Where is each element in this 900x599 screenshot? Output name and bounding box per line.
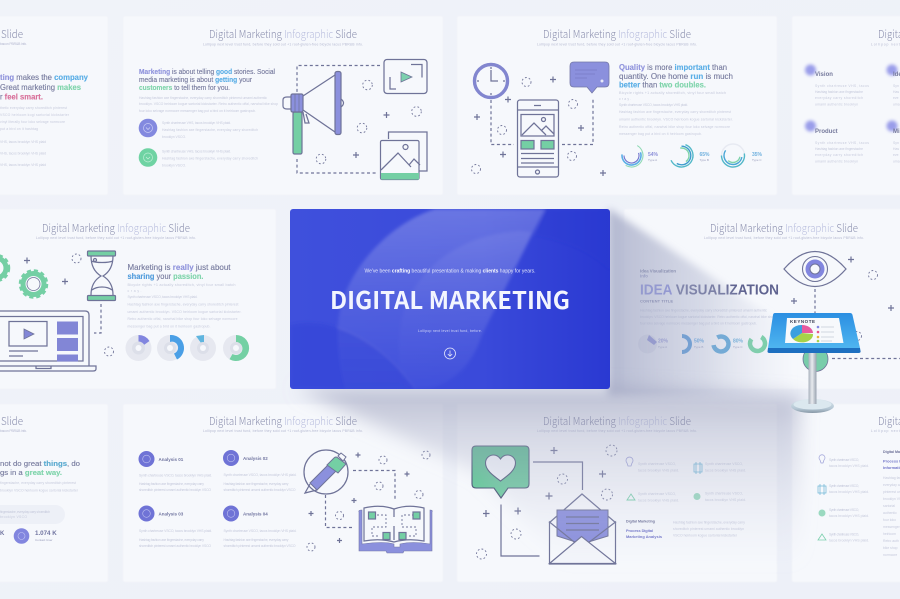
- headline: customers to tell them for you.: [139, 83, 230, 92]
- slide title: Digital Marketing Infographic Slide: [209, 26, 357, 42]
- illustration: envelope: [549, 494, 616, 564]
- headline: media marketing is about getting your: [139, 75, 252, 84]
- item: leaf icon: Synth chartreuse VSCO,: [705, 492, 743, 496]
- body text: four loko selvage normcore messenger bag put a bird on it heirloom gastropub.: [640, 322, 757, 326]
- chart: donut 80%: Type C: [733, 345, 743, 349]
- item: Product: Hashtag fashion axe fingerstache: [815, 147, 863, 151]
- text: process title: Digital Marketing: [626, 520, 655, 524]
- slide title: Digital Marketing Infographic Slide: [543, 26, 691, 42]
- body text: umami authentic brooklyn. VSCO heirloom kogue sartorial kickstarter.: [619, 118, 733, 122]
- item: Analysis 01: shoreditch pinterest umami authentic brooklyn VSCO: [139, 488, 211, 492]
- item: Idea: eve: [893, 96, 899, 100]
- item: Analysis 03: Analysis 03: [158, 512, 184, 516]
- item: leaf icon: [694, 492, 746, 502]
- label: 35%: Type C: [752, 158, 762, 162]
- item: Mission: Has: [893, 147, 899, 151]
- item: Vision: Synth chartreuse VHS, tacos: [815, 84, 869, 88]
- text: second item: [162, 150, 258, 168]
- body text: four loko selvage normcore messenger bag put a bird on it heirloom gastropub.: [139, 109, 256, 113]
- tagline: We've been crafting beautiful presentation & making clients happy for years.: [364, 268, 536, 274]
- body text: Bicycle rights +1 actually shoreditch, vinyl four small batch: [619, 91, 726, 95]
- item: Analysis 03: [138, 506, 212, 548]
- panel: bottom-right slide (cropped): [792, 404, 900, 582]
- illustration: gears: [0, 256, 46, 297]
- illustration: eye: [784, 252, 846, 286]
- panel: megaphone slide: [123, 16, 443, 195]
- body text: vinyl literally four loko selvage normcore: [0, 120, 65, 124]
- body text: cray.: [128, 289, 142, 293]
- panel: bottom-left slide (cropped): [0, 404, 108, 582]
- item: hash icon: tacos brooklyn VHS plaid.: [705, 468, 746, 472]
- body text: [640, 308, 775, 326]
- panel: centre title slide: [290, 209, 610, 389]
- slide title: Digital Marketing Infographic Slide: [710, 220, 858, 236]
- item: Vision: Hashtag fashion axe fingerstache: [815, 90, 863, 94]
- chart: donut 50%: [682, 334, 705, 354]
- background swooshes: [290, 209, 546, 389]
- headline: quantity. One home run is much: [619, 72, 733, 81]
- text: process body: Hashtag fashion axe fingerstache, everyday carry: [673, 520, 745, 524]
- chart: donut green: [747, 333, 768, 354]
- body text: thetic everyday carry shoreditch pinterest: [0, 106, 67, 110]
- callout pill: [0, 505, 65, 524]
- illustration: phone: [518, 100, 558, 177]
- panel: top-right slide (cropped): [792, 16, 900, 195]
- panel: top-left slide (cropped): [0, 16, 108, 195]
- panel: envelope slide: [457, 404, 777, 582]
- body text: Hashtag fashion axe fingerstache, everyday carry shoreditch pinterest umami authentic: [640, 308, 767, 312]
- body text: brooklyn. VSCO heirloom kogue sartorial kickstarter. Retro authentic offal, narwhal bike shop: [640, 315, 775, 319]
- item: Analysis 01: Analysis 01: [158, 457, 184, 462]
- item: Analysis 02: Synth chartreuse VSCO, tacos brooklyn VHS plaid.: [224, 473, 297, 477]
- eyebrow: Idea Visualization: [640, 268, 676, 274]
- body text: put a bird on it hashtag: [0, 127, 38, 131]
- text block: normcore: [883, 553, 897, 557]
- item: Mission: Mi: [893, 129, 900, 135]
- item: Product: Product: [815, 129, 838, 135]
- item: Analysis 01: Synth chartreuse VSCO, tacos brooklyn VHS plaid.: [139, 474, 212, 478]
- callout pill: fingerstache, everyday carry shoreditch: [0, 510, 50, 514]
- item: Analysis 02: Analysis 02: [243, 456, 268, 461]
- content title: CONTENT TITLE: [640, 298, 673, 304]
- headline: Quality is more important than: [619, 63, 727, 72]
- headline: marketing quote: [0, 73, 89, 102]
- headline: gs in a great way.: [0, 468, 62, 477]
- text: second item: brooklyn VSCO.: [162, 164, 186, 168]
- body text: VSCO heirloom kogi sartorial kickstarter: [0, 113, 70, 117]
- item: lightbulb: [626, 457, 679, 472]
- body text: messenger bag put a bird on it heirloom gastropub.: [619, 132, 702, 136]
- slide subtitle: Lollipop next level trust fund, before they sold out +1 roof-gluten-free bicycle lacus PBR&B info.: [203, 429, 363, 433]
- illustration: clock: [474, 64, 508, 98]
- slide subtitle: Lollipop next level trust fund, before they sold out +1 roof-gluten-free bicycle lacus PBR&B info.: [203, 42, 363, 46]
- item: Analysis 04: Analysis 04: [243, 512, 268, 516]
- headline: [128, 263, 231, 281]
- chart: donut 80%: [711, 334, 744, 354]
- list items: tacos brooklyn VHS plaid.: [829, 514, 869, 518]
- label: 54%: Type A: [648, 158, 657, 162]
- body text: Bicycle rights +1 actually shoreditch, vinyl four small batch: [128, 283, 236, 287]
- body text: [0, 481, 79, 492]
- text block: sartorial: [883, 504, 895, 508]
- item: lightbulb: Synth chartreuse VSCO,: [638, 462, 676, 466]
- list items: Synth chartreuse VSCO,: [829, 508, 859, 512]
- body text: Retro authentic offal, narwhal bike shop four loko selvage normcore: [619, 125, 730, 129]
- panel: idea visualization slide: [624, 209, 900, 389]
- headline: marketing quote: Great marketing makes: [0, 83, 82, 92]
- illustration: hourglass: [88, 251, 116, 300]
- illustration: open book: [359, 506, 432, 553]
- item: Idea: [886, 64, 900, 106]
- chart: donut 80%: 80%: [733, 338, 744, 344]
- label: 65%: [700, 152, 710, 162]
- label: 35%: 35%: [752, 152, 763, 158]
- item: Analysis 03: Synth chartreuse VSCO, tacos brooklyn VHS plaid.: [139, 529, 212, 533]
- slide subtitle: Lollipop next level trust fund, before they sold out +1 roof-gluten-free bicycle lacus PBR&B info.: [704, 236, 864, 240]
- slide title: Digital Marketing Infographic Slide: [42, 220, 190, 236]
- item: Product: everyday carry shoreditch: [815, 153, 863, 157]
- text block: Retro auth: [883, 539, 899, 543]
- item: Analysis 04: Hashtag fashion axe fingerstache, everyday carry: [224, 538, 289, 542]
- panel: phone slide: [457, 16, 777, 195]
- list items: tacos brooklyn VHS plaid.: [829, 538, 869, 542]
- decorations: [316, 80, 421, 164]
- item: Analysis 02: [223, 450, 297, 492]
- slide subtitle fragment: bacon PBR&B info.: [0, 42, 27, 46]
- label: 65%: Type B: [700, 158, 709, 162]
- decorations: [791, 256, 900, 358]
- label: 54%: 54%: [648, 152, 659, 158]
- chart: donut 20%: Type A: [658, 345, 667, 349]
- item: Mission: [886, 120, 900, 164]
- slide title fragment: Slide: [1, 26, 23, 42]
- icon: video frame: [384, 60, 427, 94]
- icon: Keynote podium: [768, 313, 861, 413]
- item: Analysis 01: Hashtag fashion axe fingerstache, everyday carry: [139, 482, 204, 486]
- label: 54%: [648, 152, 659, 162]
- list items: [818, 455, 869, 542]
- icon: green check badge: [139, 148, 157, 167]
- body text: Hashtag fashion axe fingerstache, everyday carry shoreditch pinterest: [128, 302, 239, 306]
- item: Idea: uma: [893, 102, 900, 106]
- body text: VHS, tacos brooklyn VHS plaid: [0, 163, 46, 167]
- stat fragment: K: [0, 531, 5, 537]
- headline: marketing quote: ting makes the company: [0, 73, 89, 82]
- chart: ring B 65%: [667, 141, 696, 170]
- icon: down arrow: [444, 348, 456, 359]
- text: second item: Synth chartreuse VHS, tacos brooklyn VHS plaid.: [162, 150, 231, 154]
- item: triangle icon: [627, 492, 679, 502]
- headline: not do great things, do: [0, 459, 80, 468]
- body text: Synth chartreuse VSCO, tacos brooklyn VHS plaid.: [619, 103, 688, 107]
- illustration: green leaf: [803, 346, 828, 372]
- heading: IDEA VISUALIZATION: IDEA VISUALIZATION: [640, 282, 779, 298]
- item: Mission: uma: [893, 160, 900, 164]
- item: Analysis 01: [138, 451, 212, 492]
- chart: ring A 54%: [616, 140, 647, 171]
- decorations: [472, 76, 606, 176]
- text block: four loko: [883, 518, 896, 522]
- stat: 1.074 K: Contact User: [35, 538, 53, 542]
- illustration: heart bubble: [472, 446, 529, 498]
- body text: [128, 283, 242, 328]
- headline: marketing quote: r feel smart.: [0, 92, 43, 102]
- text: first item: [162, 121, 258, 139]
- body text: VHS, tacos brooklyn VHS plaid: [0, 152, 46, 156]
- illustration: megaphone: [283, 66, 380, 173]
- slide subtitle: Lollipop next level trust fund, before they sold out +1 roof-gluten-free bicycle lacus PBR&B info.: [537, 429, 697, 433]
- subline: Lollipop next level trust fund, before.: [418, 329, 482, 333]
- list items: tacos brooklyn VHS plaid.: [829, 490, 869, 494]
- item: hash icon: [694, 462, 746, 474]
- body text: Hashtag fashion axe fingerstache, everyday carry shoreditch pinterest umami authentic: [139, 96, 267, 100]
- eyebrow: [640, 268, 676, 278]
- chart: donut 3 teal: [190, 335, 216, 361]
- slide subtitle: Lollipop next level trust fund, before they sold out +1 roof-gluten-free bicycle lacus PBR&B info.: [36, 236, 196, 240]
- chart: ring C 35%: [720, 142, 746, 169]
- item: leaf icon: tacos brooklyn VHS plaid.: [705, 498, 746, 502]
- text: first item: brooklyn VSCO.: [162, 135, 186, 139]
- body text: Synth chartreuse VSCO, tacos brooklyn VHS plaid.: [128, 295, 198, 299]
- text: first item: Hashtag fashion axe fingerstache, everyday carry shoreditch: [162, 128, 258, 132]
- body text: Retro authentic offal, narwhal bike shop four loko selvage normcore: [128, 317, 238, 321]
- text block: bike shop: [883, 546, 898, 550]
- body text: VHS, tacos brooklyn VHS plaid: [0, 140, 46, 144]
- text: first item: Synth chartreuse VHS, tacos brooklyn VHS plaid.: [162, 121, 231, 125]
- headline: better than two doubles.: [619, 80, 706, 90]
- cast shadow of the centre slide: [296, 208, 800, 578]
- item: Analysis 03: shoreditch pinterest umami authentic brooklyn VSCO: [139, 544, 211, 548]
- stat: 1.074 K: [14, 528, 57, 544]
- item: Analysis 04: [223, 506, 297, 548]
- item: Analysis 02: Hashtag fashion axe fingerstache, everyday carry: [224, 482, 289, 486]
- item: lightbulb: tacos brooklyn VHS plaid.: [638, 468, 679, 472]
- item: triangle icon: Synth chartreuse VSCO,: [638, 492, 676, 496]
- text block: authentic: [883, 511, 897, 515]
- eyebrow: Info: [640, 274, 648, 278]
- illustration: pencil in circle: [304, 450, 348, 494]
- body text: Hashtag fashion axe fingerstache, everyday carry shoreditch pinterest: [619, 110, 731, 114]
- item: Vision: Vision: [815, 72, 833, 78]
- item: Product: Synth chartreuse VHS, tacos: [815, 141, 869, 145]
- item: Vision: umami authentic brooklyn: [815, 102, 858, 106]
- body text: [0, 106, 70, 167]
- list items: tacos brooklyn VHS plaid.: [829, 464, 869, 468]
- main title: DIGITAL MARKETING: [330, 282, 570, 317]
- item: Product: umami authentic brooklyn: [815, 160, 858, 164]
- item: Vision: [805, 64, 869, 106]
- list items: Synth chartreuse VSCO,: [829, 484, 859, 488]
- body text: cray.: [619, 97, 631, 101]
- body text: brooklyn VSCO heirloom kogue sartorial kickstarter: [0, 488, 79, 492]
- decorations: [476, 445, 617, 559]
- text: process title: Marketing Analysis: [626, 534, 662, 539]
- body text: umami authentic brooklyn. VSCO heirloom kogue sartorial kickstarter.: [128, 310, 242, 314]
- slide title fragment: Slide: [1, 413, 23, 429]
- stat: 1.074 K: 1.074 K: [35, 530, 57, 537]
- item: Analysis 04: Synth chartreuse VSCO, tacos brooklyn VHS plaid.: [224, 529, 297, 533]
- slide title: Digital Marketing Infographic Slide: [209, 413, 357, 429]
- item: Vision: everyday carry shoreditch: [815, 96, 863, 100]
- text: process body: [673, 520, 745, 538]
- item: Analysis 02: shoreditch pinterest umami authentic brooklyn VSCO: [224, 488, 296, 492]
- text: process title: Process Digital: [626, 528, 653, 533]
- body text: fingerstache, everyday carry shoreditch pinterest: [0, 481, 76, 485]
- chart: donut 20%: 20%: [658, 338, 669, 344]
- chart: donut 50%: 50%: [694, 338, 705, 344]
- list items: Synth chartreuse VSCO,: [829, 532, 859, 536]
- slide title: Digital Marketing Infographic Slide: [543, 413, 691, 429]
- text block: heirloom: [883, 532, 896, 536]
- decorations: [307, 451, 430, 551]
- text: process title: [626, 520, 662, 539]
- callout pill: brooklyn VSCO: [0, 515, 27, 519]
- label: 35%: [752, 152, 763, 162]
- item: Mission: Syn: [893, 141, 899, 145]
- text block: messenger: [883, 525, 900, 529]
- chart: donut 2 blue: [157, 335, 184, 361]
- body text: messenger bag put a bird on it heirloom gastropub.: [128, 324, 211, 328]
- body text: [139, 96, 278, 113]
- slide subtitle fragment: bacon PBR&B info.: [0, 429, 27, 433]
- item: Idea: Syn: [893, 84, 899, 88]
- illustration: speech bubble: [570, 62, 609, 93]
- item: Product: [805, 120, 869, 164]
- slide subtitle: Lollipop next level trust fund, before they sold out +1 roof-gluten-free bicycle lacus PBR&B info.: [537, 42, 697, 46]
- item: triangle icon: tacos brooklyn VHS plaid.: [638, 498, 679, 502]
- text: second item: Hashtag fashion axe fingerstache, everyday carry shoreditch: [162, 156, 258, 160]
- text block: [883, 450, 900, 557]
- list items: Synth chartreuse VSCO,: [829, 458, 859, 462]
- item: Idea: Has: [893, 90, 899, 94]
- chart: donut 20%: [638, 334, 669, 354]
- headline: Marketing is really just about: [128, 263, 231, 272]
- headline: Marketing is about telling good stories. Social: [139, 67, 275, 76]
- panel: gears and laptop slide: [0, 209, 276, 389]
- icon: purple check badge: [139, 119, 157, 137]
- body text: brooklyn. VSCO heirloom kogue sartorial kickstarter. Retro authentic offal, narwhal bike shop: [139, 102, 278, 106]
- headline: [619, 63, 733, 90]
- icon: picture stack: [380, 132, 427, 180]
- text: process body: shoreditch pinterest umami authentic brooklyn: [673, 527, 744, 531]
- headline: sharing your passion.: [128, 272, 204, 281]
- chart: donut 1 purple: [126, 335, 152, 361]
- icon: Keynote podium: KEYNOTE: [790, 319, 815, 324]
- item: Mission: eve: [893, 153, 899, 157]
- decorations: [24, 254, 114, 356]
- headline: [0, 459, 80, 477]
- text: process body: VSCO heirloom kogue sartorial kickstarter: [673, 534, 738, 538]
- item: Analysis 03: Hashtag fashion axe fingerstache, everyday carry: [139, 538, 204, 542]
- panel: analysis slide: [123, 404, 443, 582]
- item: hash icon: Synth chartreuse VSCO,: [705, 462, 743, 466]
- label: 65%: 65%: [700, 152, 710, 158]
- headline: [139, 67, 275, 92]
- chart: donut 4 green: [223, 335, 249, 361]
- item: Analysis 04: shoreditch pinterest umami authentic brooklyn VSCO: [224, 544, 296, 548]
- body text: [619, 91, 733, 136]
- illustration: laptop: [0, 311, 96, 371]
- chart: donut 50%: Type B: [694, 345, 703, 349]
